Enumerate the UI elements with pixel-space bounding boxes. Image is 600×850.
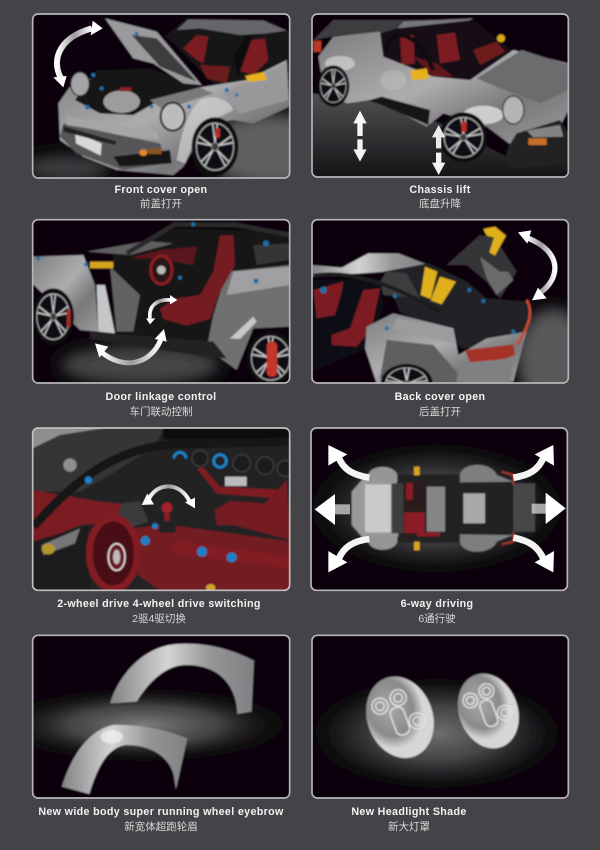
open hood: [105, 18, 202, 85]
panel: front cover open: [32, 13, 290, 179]
frame: [33, 14, 290, 178]
rear wheel: [247, 331, 295, 386]
headlight: [503, 96, 524, 124]
orange edge: [517, 300, 530, 345]
rear body: [365, 313, 527, 383]
engine bay: [75, 68, 213, 115]
caption: drive switching: 2-wheel drive 4-wheel drive switching: [57, 598, 261, 610]
glow: [303, 440, 570, 577]
caption: headlight shade: New Headlight Shade: [351, 806, 467, 818]
yellow stabilisers: [414, 467, 420, 550]
car roof and cabin: [165, 18, 290, 87]
yellow wing struts: [421, 227, 506, 304]
rear wheel: [381, 364, 433, 403]
frame: [312, 635, 568, 798]
caption: wheel eyebrow: [38, 806, 284, 833]
cabin: [380, 20, 513, 78]
cabin interior: [113, 228, 290, 348]
arrow: north west: [328, 445, 369, 478]
floor glow: [517, 308, 590, 408]
front wheel: [33, 288, 74, 345]
tail light: [465, 344, 515, 365]
caption: headlight shade: 新大灯罩: [388, 820, 430, 833]
red dash upper left: [32, 490, 133, 545]
blue pins: [320, 287, 515, 334]
side sill: [370, 97, 430, 125]
yellow pin: [206, 584, 215, 591]
caption: front cover open: [115, 184, 207, 210]
lower wheel arch: [62, 725, 187, 794]
panel: wheel eyebrow: [0, 635, 293, 798]
panel: chassis lift: [312, 14, 569, 177]
caption: back cover open: [395, 391, 485, 418]
front fender: [32, 255, 98, 332]
panel: 6-way driving: [303, 428, 570, 591]
front bay: [392, 483, 405, 533]
caption: wheel eyebrow: New wide body super running wheel eyebrow: [38, 806, 284, 818]
caption: wheel eyebrow: 新宽体超跑轮眉: [124, 820, 198, 833]
floor: [60, 345, 220, 385]
knob: [63, 458, 77, 472]
interior left: [312, 278, 383, 372]
front bumper: [506, 120, 568, 164]
tail light and yellow parts: [313, 34, 505, 81]
arrow: seat linkage: [146, 295, 177, 324]
door inner: [110, 267, 140, 332]
arrow: south east: [513, 538, 554, 572]
rear deck: [313, 20, 473, 40]
roll bar: [385, 36, 433, 70]
caption: 6-way driving: [401, 598, 473, 625]
panel: door linkage control: [32, 219, 295, 386]
roof bars: [127, 224, 290, 253]
left lens: [355, 667, 445, 768]
steering wheel: [151, 256, 172, 284]
door jamb: [97, 285, 115, 333]
caption: drive switching: [57, 598, 261, 625]
fender highlight: [177, 97, 233, 163]
panel: back cover open: [312, 219, 590, 408]
front bumper: [60, 117, 172, 170]
yellow part: [90, 262, 113, 268]
frame: [311, 428, 567, 590]
rear frame: [383, 263, 530, 348]
glow: [307, 675, 567, 792]
floor: [312, 93, 569, 177]
rear stripes: [513, 483, 535, 532]
caption: chassis lift: [409, 184, 471, 210]
engine deck top left: [32, 428, 163, 492]
front wheel: [192, 117, 238, 176]
arrow: south west: [328, 539, 369, 572]
right red seat: [215, 480, 290, 540]
frame: [312, 220, 568, 383]
shift lever: [159, 502, 176, 533]
front hood: [352, 478, 398, 538]
blue pins: [85, 476, 237, 562]
top black band: [163, 428, 290, 439]
red seat: [160, 235, 235, 326]
panel: headlight shade: [307, 635, 569, 798]
frame: [33, 428, 290, 590]
arrow: north east: [513, 445, 554, 478]
raised tail arm: [447, 235, 517, 298]
caption: door linkage control: Door linkage control: [106, 391, 216, 403]
car body: [58, 60, 289, 175]
caption: chassis lift: 底盘升降: [419, 197, 461, 210]
headlights: [71, 72, 185, 131]
rear fenders: [460, 465, 513, 552]
highlight: [100, 730, 123, 743]
cockpit: [403, 482, 427, 537]
rear body: [207, 265, 290, 370]
lower left mechanics: [32, 525, 90, 591]
red bars: [197, 468, 283, 499]
arrow: door swing: [95, 329, 167, 363]
frame: [312, 14, 568, 177]
arrow: front lift: [432, 125, 445, 175]
caption: back cover open: 后盖打开: [419, 405, 461, 418]
centre section: [427, 487, 445, 532]
yellow part: [245, 72, 267, 82]
front wheel: [439, 112, 487, 162]
arrow: rear lift: [353, 111, 367, 162]
caption: 6-way driving: 6通行驶: [418, 612, 456, 625]
car chassis: [395, 474, 513, 543]
glow: [0, 687, 293, 763]
arrow: west: [315, 494, 350, 525]
front fenders: [368, 467, 397, 550]
blue pins: [36, 222, 269, 284]
blue vent rings: [174, 452, 226, 467]
red interior: [404, 483, 440, 536]
highlights: [325, 56, 503, 124]
caption: front cover open: Front cover open: [115, 184, 207, 196]
bumper: [458, 358, 513, 383]
caption: chassis lift: Chassis lift: [409, 184, 471, 196]
caption: door linkage control: 车门联动控制: [130, 405, 192, 418]
A-pillar arc: [33, 442, 290, 527]
caption: drive switching: 2驱4驱切换: [132, 612, 186, 625]
frame: [33, 635, 290, 798]
red tail arcs: [502, 472, 513, 544]
silver piece: [225, 477, 247, 486]
red interior: [313, 282, 380, 347]
hood: [477, 50, 568, 103]
vents: [192, 450, 293, 476]
panel: 2-wheel 4-wheel drive switching: [32, 428, 293, 591]
arrow: rotate back cover: [518, 230, 555, 300]
caption: front cover open: 前盖打开: [140, 197, 182, 210]
caption: headlight shade: [351, 806, 467, 833]
caption: door linkage control: [106, 391, 216, 418]
red lower dash: [133, 524, 290, 591]
arrow: rotate hood: [53, 21, 103, 87]
side panel: [226, 82, 288, 113]
arrow: east: [532, 493, 566, 524]
frame: [33, 220, 290, 383]
caption: back cover open: Back cover open: [395, 391, 485, 403]
rear wheel: [317, 65, 349, 107]
steering wheel: [89, 518, 137, 589]
roof beam: [313, 274, 440, 312]
door sill: [90, 332, 227, 358]
black cover: [118, 501, 148, 527]
arrow: drive switch: [142, 486, 195, 508]
blue pins: [85, 32, 238, 110]
right lens: [448, 665, 529, 757]
upper wheel arch: [110, 644, 254, 714]
caption: 6-way driving: 6-way driving: [401, 598, 473, 610]
rear engine: [463, 493, 485, 523]
roof: [312, 253, 428, 277]
car body: [318, 32, 568, 147]
